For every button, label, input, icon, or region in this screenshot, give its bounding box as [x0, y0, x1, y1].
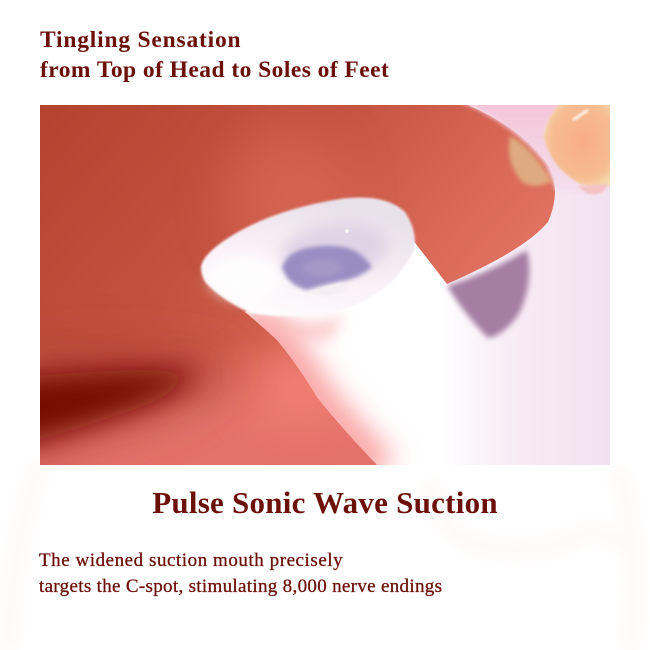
heading: Pulse Sonic Wave Suction — [152, 485, 498, 520]
description — [39, 550, 442, 596]
photo: suction device on coral background — [40, 105, 610, 465]
description: targets the C-spot, stimulating 8,000 nerve endings — [39, 576, 442, 596]
inner cup — [279, 222, 388, 268]
title — [40, 27, 389, 82]
title: from Top of Head to Soles of Feet — [40, 56, 389, 82]
backdrop glow — [229, 131, 332, 228]
title: Tingling Sensation — [40, 27, 241, 53]
device body — [240, 100, 620, 474]
suction mouth rim — [201, 198, 415, 316]
cast shadow — [40, 340, 231, 465]
description: The widened suction mouth precisely — [39, 550, 343, 571]
finger tops — [460, 105, 610, 196]
purple centre — [282, 246, 372, 290]
coral backdrop — [40, 105, 555, 418]
lilac shadow on device — [447, 250, 529, 338]
